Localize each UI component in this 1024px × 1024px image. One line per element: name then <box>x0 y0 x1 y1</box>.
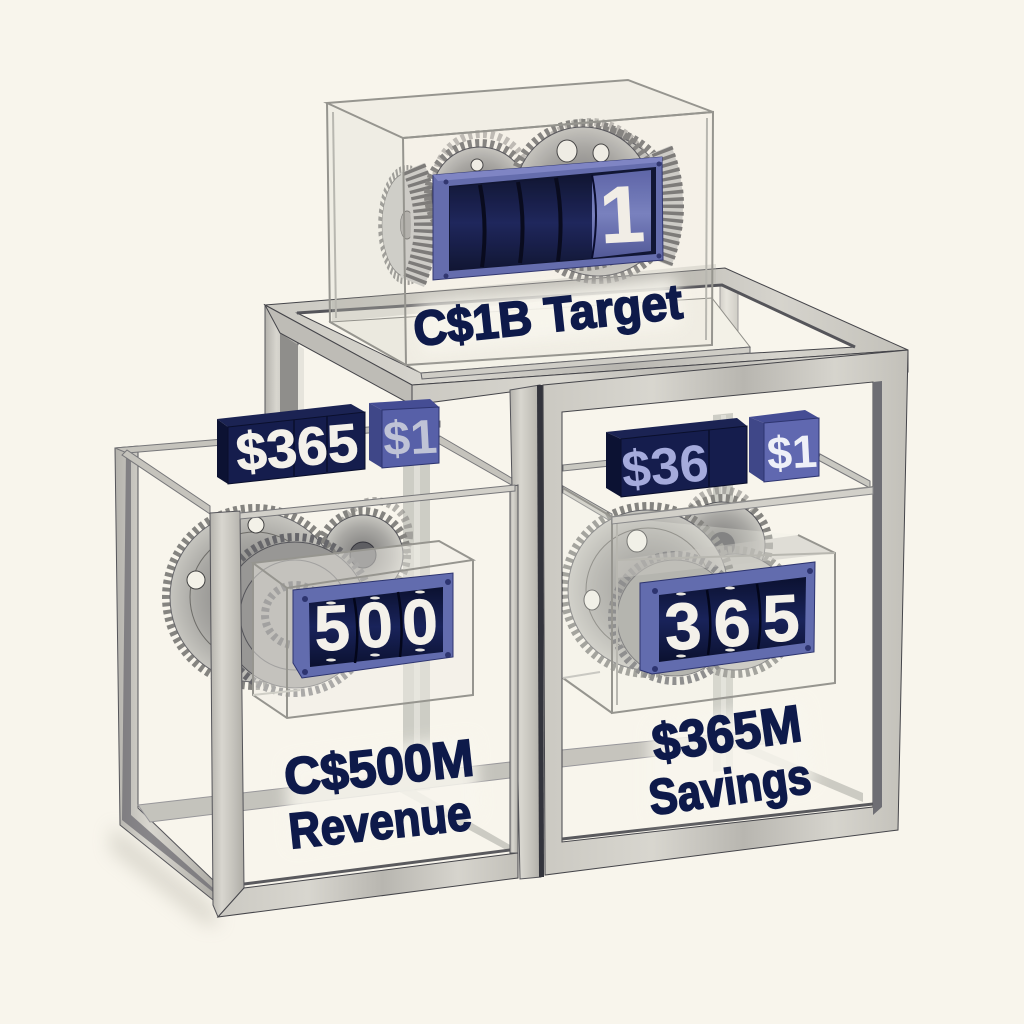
block $36: $36 <box>619 434 711 500</box>
left box back pillar <box>403 418 430 792</box>
drums <box>659 577 806 662</box>
gear: large back <box>564 506 732 674</box>
screws <box>652 588 658 594</box>
block $365: $365 <box>234 413 360 483</box>
label: C$500M Revenue: C$500M <box>281 729 477 807</box>
gear: upper right <box>319 511 407 599</box>
panel: right box back frame <box>562 413 863 802</box>
odometer 500 <box>293 573 453 678</box>
small glass box <box>253 541 473 718</box>
gear: right rim <box>660 150 673 262</box>
left box back top bar <box>115 421 440 453</box>
odometer 1 <box>433 157 663 280</box>
ground shadow <box>110 825 220 925</box>
block $1: $1 <box>382 411 438 466</box>
table top surface <box>265 268 908 385</box>
right box floor side bar <box>745 748 863 802</box>
label: C$500M Revenue <box>281 729 477 859</box>
shelf side bars <box>563 486 612 522</box>
block $1: $1 <box>766 425 818 479</box>
panel: C$1B target <box>327 80 750 379</box>
odometer 365: 5 <box>761 580 801 656</box>
top shelf front bar <box>612 487 873 524</box>
table back leg <box>720 281 738 352</box>
left box back left pillar <box>115 446 213 900</box>
drum separators <box>480 178 561 267</box>
heading: C$1B Target: C$1B Target <box>411 275 685 357</box>
label glow <box>650 700 815 820</box>
odometer 365 <box>640 562 815 674</box>
gear: middle front <box>217 537 373 693</box>
left box floor right side <box>396 786 510 852</box>
gear: top right <box>675 498 769 592</box>
value blocks $36 $1 <box>606 410 819 500</box>
bottom bar <box>218 853 518 917</box>
right shelf rear <box>563 454 870 522</box>
right box front frame <box>543 350 908 875</box>
panel: $365M savings <box>543 350 908 875</box>
left box left top bar <box>122 450 210 514</box>
left box right top bar <box>436 436 515 487</box>
right box back floor bar <box>562 728 780 767</box>
value blocks $365 $1 <box>217 399 439 484</box>
gear: back top <box>341 501 409 569</box>
gears <box>564 490 797 681</box>
digit ticks <box>676 586 735 658</box>
table front bar <box>412 350 908 405</box>
label: $365M Savings: Savings <box>645 748 814 826</box>
right pillar <box>510 485 518 853</box>
odometer 500: 0 <box>355 588 395 662</box>
block $1 <box>749 410 819 482</box>
label glow <box>418 276 682 353</box>
gear: top middle back <box>436 134 528 226</box>
window shade <box>449 167 656 271</box>
panel: C$500M revenue <box>166 399 518 917</box>
frame <box>433 157 663 280</box>
screws <box>444 180 448 184</box>
label: $365M Savings <box>645 695 814 826</box>
inner groove bottom <box>562 804 873 839</box>
label: C$500M Revenue: Revenue <box>286 785 474 859</box>
digits: 3 <box>663 588 703 664</box>
inner recess line <box>297 285 855 347</box>
right box back pillar <box>713 413 733 772</box>
glass box front <box>327 80 713 365</box>
gear: middle front <box>612 555 738 681</box>
base plate <box>330 298 750 373</box>
panel: center pillar <box>510 385 544 879</box>
gear: left front rim <box>412 168 426 282</box>
dark drums <box>450 176 594 270</box>
glass box rear faces <box>327 80 713 138</box>
odometer 365: 6 <box>712 585 752 661</box>
table front arm <box>265 305 412 405</box>
label: $365M Savings: $365M <box>649 695 805 773</box>
gears <box>166 501 409 693</box>
drum separators <box>707 584 760 655</box>
label glow <box>285 735 480 850</box>
gears <box>380 122 673 282</box>
drum separators <box>354 592 402 663</box>
top bar <box>240 485 515 519</box>
panel: left box back frame <box>115 418 515 900</box>
gear: top right <box>511 123 655 267</box>
block $1 <box>369 399 439 468</box>
digits: 5 <box>312 591 352 665</box>
gear: lower right <box>523 130 673 280</box>
odometer 500: 0 <box>400 585 440 659</box>
digit 1: 1 <box>598 169 647 260</box>
frame <box>293 573 453 678</box>
left box front frame <box>210 485 518 917</box>
inner groove right <box>873 381 882 815</box>
gear: large back <box>166 508 344 686</box>
glass floor back band <box>332 264 716 322</box>
digit ticks <box>326 590 425 662</box>
screws <box>302 596 308 602</box>
gear: top middle <box>428 143 532 247</box>
gear: left side <box>380 169 434 281</box>
drums <box>309 587 443 667</box>
light drum <box>592 170 651 258</box>
gear: lower right <box>673 550 797 674</box>
gear: top right back <box>687 490 757 560</box>
shelf back bar <box>563 460 610 471</box>
left box back floor bar <box>138 762 510 822</box>
table frame behind top box <box>265 268 908 445</box>
block $36 <box>606 418 747 500</box>
table left leg <box>265 305 298 445</box>
frame <box>640 562 815 674</box>
front left pillar <box>210 511 244 917</box>
small glass box <box>563 487 873 713</box>
gear: top right back <box>532 122 648 238</box>
